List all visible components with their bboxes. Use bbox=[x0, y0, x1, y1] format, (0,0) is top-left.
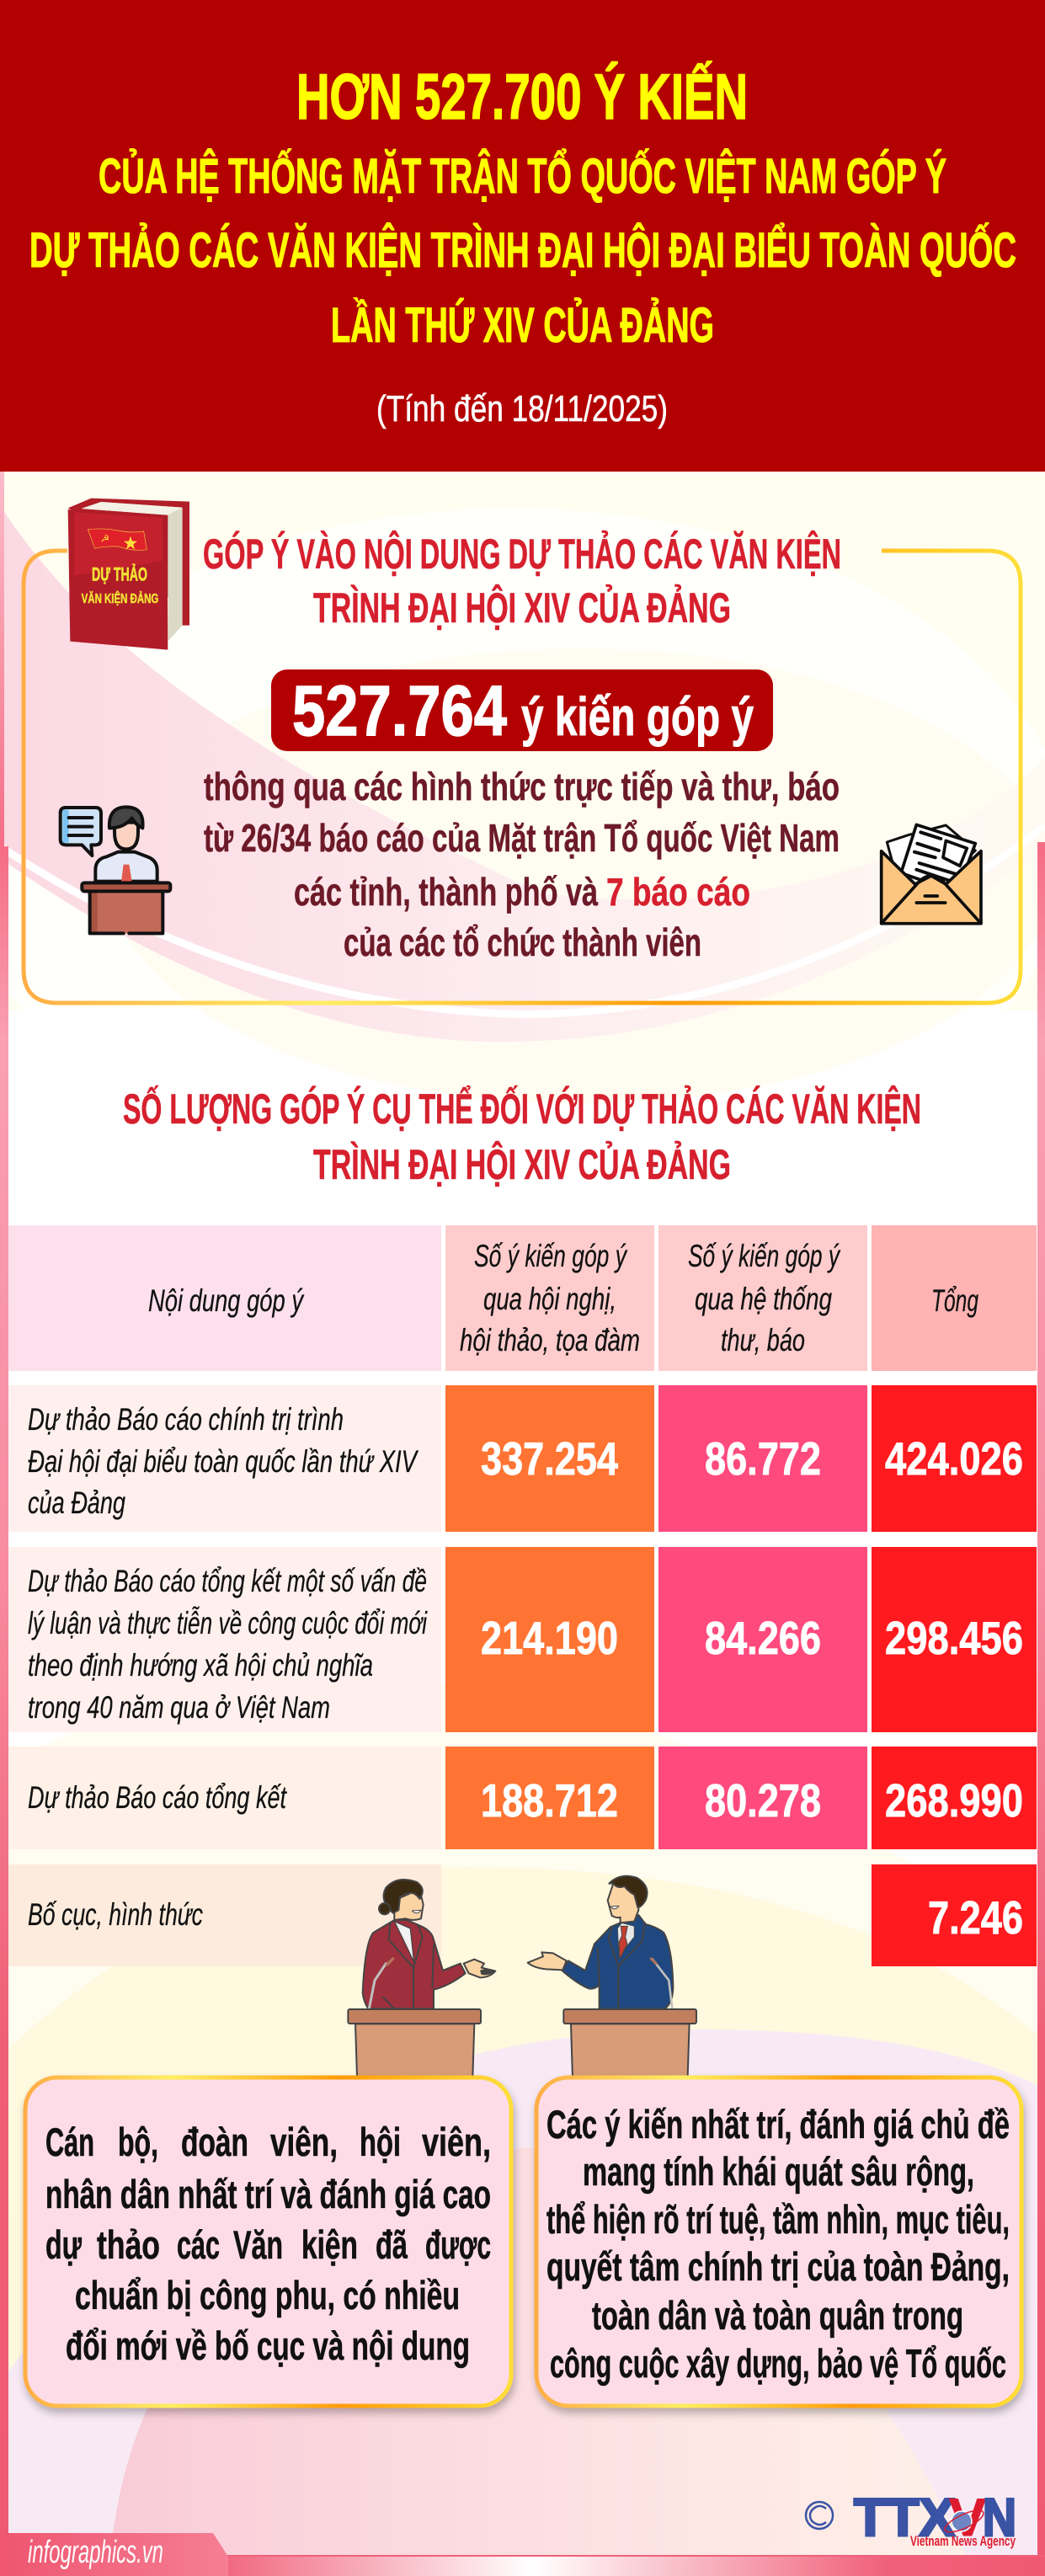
table header row: Tổng bbox=[931, 1283, 978, 1318]
table header row: Số ý kiến góp ý bbox=[474, 1239, 628, 1273]
table header row: qua hệ thống bbox=[695, 1282, 832, 1316]
description text: các tỉnh, thành phố và bbox=[294, 870, 598, 914]
callout text left: chuẩn bị công phu, có nhiều bbox=[75, 2273, 460, 2317]
icon: red book bbox=[68, 499, 189, 650]
section heading: so luong gop y bbox=[123, 1085, 921, 1188]
table header row: Số ý kiến góp ý bbox=[688, 1239, 841, 1273]
table row 3: 80.278 bbox=[705, 1774, 821, 1827]
callout text left bbox=[45, 2120, 491, 2368]
left podium bbox=[348, 2009, 481, 2077]
table row 2: theo định hướng xã hội chủ nghĩa bbox=[28, 1648, 373, 1683]
table row 4 bbox=[8, 1864, 1037, 1966]
table row 1: Dự thảo Báo cáo chính trị trình bbox=[28, 1402, 344, 1437]
icon: red book: ☭ bbox=[100, 532, 109, 544]
table row 1: 337.254 bbox=[481, 1432, 618, 1485]
description text: thông qua các hình thức trực tiếp và thư, báo bbox=[204, 765, 840, 808]
description text: 7 báo cáo bbox=[606, 870, 750, 914]
table row 4: 7.246 bbox=[928, 1891, 1023, 1944]
table bbox=[8, 1225, 1037, 1966]
callout text left: được bbox=[425, 2222, 491, 2267]
table row 3: Dự thảo Báo cáo tổng kết bbox=[28, 1780, 287, 1815]
callout text left: nhân dân nhất trí và đánh giá cao bbox=[45, 2172, 491, 2216]
subtitle line 3: LẦN THỨ XIV CỦA ĐẢNG bbox=[331, 298, 714, 353]
table header row: Nội dung góp ý bbox=[148, 1283, 305, 1318]
callout text left: Văn bbox=[233, 2222, 283, 2267]
callout: right box bbox=[536, 2077, 1021, 2406]
icon: red book: DỰ THẢO bbox=[92, 563, 147, 584]
footer tab: infographics.vn bbox=[0, 2533, 228, 2576]
callout text left: dự bbox=[45, 2222, 83, 2267]
panel: gop y vao noi dung bbox=[24, 530, 1021, 1003]
callout text left: đổi mới về bố cục và nội dung bbox=[66, 2323, 470, 2368]
description text: của các tổ chức thành viên bbox=[344, 920, 701, 964]
table header row: hội thảo, tọa đàm bbox=[460, 1323, 640, 1357]
man speaker bbox=[528, 1876, 673, 2008]
table header row bbox=[8, 1225, 1037, 1371]
description text bbox=[204, 765, 840, 964]
table row 2: 214.190 bbox=[481, 1612, 618, 1664]
table row 2: lý luận và thực tiễn về công cuộc đổi mới bbox=[28, 1606, 428, 1640]
callout text left: bộ, bbox=[118, 2120, 158, 2164]
table row 2: trong 40 năm qua ở Việt Nam bbox=[28, 1690, 330, 1725]
table row 2: 84.266 bbox=[705, 1612, 821, 1664]
callout text left: hội bbox=[360, 2120, 401, 2164]
table row 1: của Đảng bbox=[28, 1485, 125, 1520]
callout text left: Cán bbox=[45, 2120, 94, 2164]
table row 4: Bố cục, hình thức bbox=[28, 1897, 203, 1932]
callout: left box bbox=[25, 2077, 511, 2406]
logo: TTXVN: TTX bbox=[854, 2488, 955, 2547]
total badge: 527.764 bbox=[292, 671, 507, 750]
table row 3 bbox=[8, 1747, 1037, 1849]
icon: red book: VĂN KIỆN ĐẢNG bbox=[82, 590, 158, 606]
icon: speaker at podium bbox=[61, 807, 170, 933]
panel heading: TRÌNH ĐẠI HỘI XIV CỦA ĐẢNG bbox=[313, 584, 731, 632]
callout text left: thảo bbox=[97, 2222, 160, 2267]
callout text left: đã bbox=[376, 2222, 408, 2267]
table header row: qua hội nghị, bbox=[483, 1282, 616, 1316]
logo: TTXVN: V bbox=[949, 2488, 986, 2547]
callout text left: viên, bbox=[422, 2120, 491, 2164]
callout text left: kiện bbox=[301, 2222, 358, 2267]
callout text left: các bbox=[177, 2222, 220, 2267]
table row 1 bbox=[8, 1385, 1037, 1532]
icon: open envelope bbox=[882, 824, 981, 924]
date note: (Tính đến 18/11/2025) bbox=[376, 388, 668, 429]
callout text left: viên, bbox=[270, 2120, 338, 2164]
section heading: so luong gop y: TRÌNH ĐẠI HỘI XIV CỦA ĐẢNG bbox=[313, 1140, 731, 1188]
table row 3: 188.712 bbox=[481, 1774, 618, 1827]
callout text left: đoàn bbox=[181, 2120, 248, 2164]
panel heading bbox=[203, 530, 841, 632]
right podium bbox=[563, 2009, 696, 2077]
table row 2: Dự thảo Báo cáo tổng kết một số vấn đề bbox=[28, 1564, 427, 1598]
woman speaker bbox=[363, 1880, 495, 2008]
table row 1: Đại hội đại biểu toàn quốc lần thứ XIV bbox=[28, 1444, 419, 1479]
illustration: two speakers at podiums bbox=[348, 1876, 696, 2077]
main title: HƠN 527.700 Ý KIẾN bbox=[296, 61, 748, 133]
callout text right bbox=[546, 2102, 1010, 2386]
total badge bbox=[271, 669, 773, 751]
copyright symbol bbox=[806, 2502, 833, 2529]
table row 2 bbox=[8, 1547, 1037, 1732]
header banner bbox=[0, 0, 1045, 472]
logo: TTXVN: N bbox=[983, 2488, 1016, 2547]
table header row: thư, báo bbox=[721, 1323, 805, 1357]
total badge: ý kiến góp ý bbox=[521, 686, 754, 747]
table row 1: 86.772 bbox=[705, 1432, 821, 1485]
footer tab: infographics.vn: infographics.vn bbox=[28, 2535, 163, 2570]
logo: TTXVN bbox=[854, 2488, 1016, 2549]
